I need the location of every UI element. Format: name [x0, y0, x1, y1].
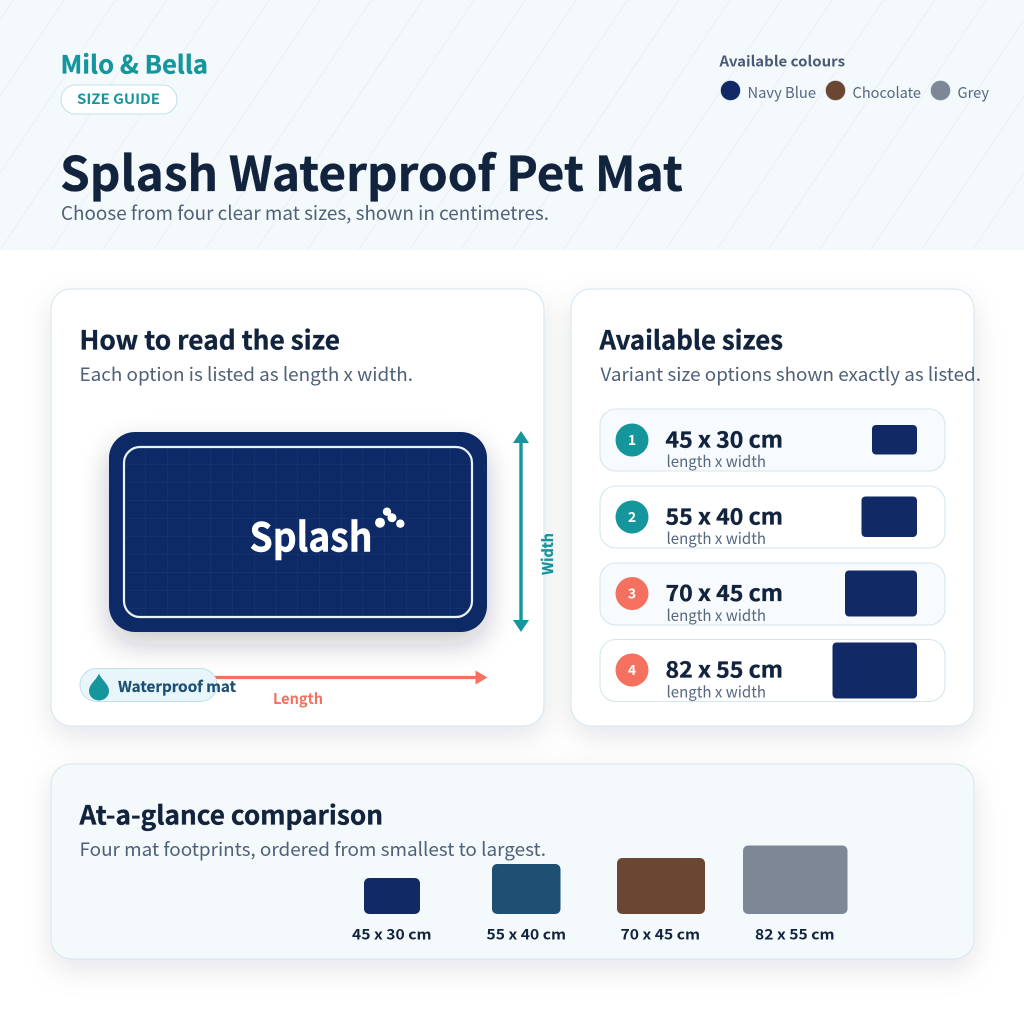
- swatch: chocolate: [826, 80, 921, 103]
- size row 2: length x width: [666, 527, 766, 549]
- footprint 45 x 30: 45 x 30 cm: [352, 924, 432, 944]
- swatch: navy blue: [720, 80, 816, 103]
- footprint 70 x 45: [617, 858, 705, 944]
- footprint 82 x 55: 82 x 55 cm: [755, 924, 834, 944]
- size row 2: [600, 486, 945, 549]
- footprint 55 x 40: 55 x 40 cm: [486, 924, 566, 944]
- heading: how to read: How to read the size: [80, 320, 340, 358]
- size row 1: [600, 409, 945, 472]
- size row 3: 3: [628, 584, 636, 604]
- swatch: chocolate: Chocolate: [852, 82, 921, 103]
- footprint 55 x 40: [486, 864, 566, 944]
- title: Splash Waterproof Pet Mat: [60, 135, 683, 205]
- mat illustration: [109, 432, 487, 632]
- panel: how to read the size: [51, 289, 558, 726]
- size row 1: length x width: [666, 450, 766, 472]
- panel: at-a-glance comparison: [51, 764, 974, 959]
- arrow: length: [210, 670, 488, 684]
- heading: comparison: At-a-glance comparison: [78, 796, 383, 832]
- header band: [0, 0, 1024, 250]
- size row 3: length x width: [666, 604, 766, 626]
- size row 1: 1: [628, 430, 636, 450]
- arrow: width: [513, 431, 529, 632]
- waterproof badge: Waterproof mat: [118, 676, 237, 697]
- size row 3: [600, 563, 945, 626]
- footprint 45 x 30: [352, 878, 432, 944]
- size row 4: 82 x 55 cm: [666, 652, 783, 684]
- label: length: Length: [273, 688, 323, 709]
- mat logo: Splash: [250, 506, 372, 564]
- label: width: Width: [537, 533, 558, 575]
- size row 4: [600, 640, 945, 702]
- size row 4: length x width: [666, 680, 766, 702]
- icon: water drop: [89, 674, 109, 700]
- swatch: grey: Grey: [958, 82, 989, 103]
- size row 2: 55 x 40 cm: [666, 500, 783, 532]
- description: available sizes: Variant size options shown exactly as listed.: [600, 361, 981, 387]
- footprint 70 x 45: 70 x 45 cm: [620, 924, 700, 944]
- size guide badge: SIZE GUIDE: [77, 89, 160, 109]
- description: how to read: Each option is listed as length x width.: [80, 361, 413, 387]
- footprint 82 x 55: [743, 846, 848, 944]
- colour legend: Available colours: [718, 50, 845, 72]
- panel: available sizes: [571, 289, 981, 726]
- heading: available sizes: Available sizes: [599, 320, 783, 358]
- subtitle: Choose from four clear mat sizes, shown in centimetres.: [61, 199, 549, 226]
- size row 4: 4: [628, 660, 636, 680]
- size guide badge: [61, 85, 177, 114]
- colour legend: [718, 50, 989, 103]
- brand name: Milo & Bella: [60, 46, 208, 82]
- description: comparison: Four mat footprints, ordered from smallest to largest.: [80, 836, 546, 862]
- size row 2: 2: [628, 507, 636, 527]
- size row 1: 45 x 30 cm: [666, 422, 783, 454]
- size row 3: 70 x 45 cm: [666, 576, 783, 608]
- swatch: navy blue: Navy Blue: [748, 82, 816, 103]
- swatch: grey: [930, 80, 989, 103]
- waterproof badge: [80, 668, 237, 702]
